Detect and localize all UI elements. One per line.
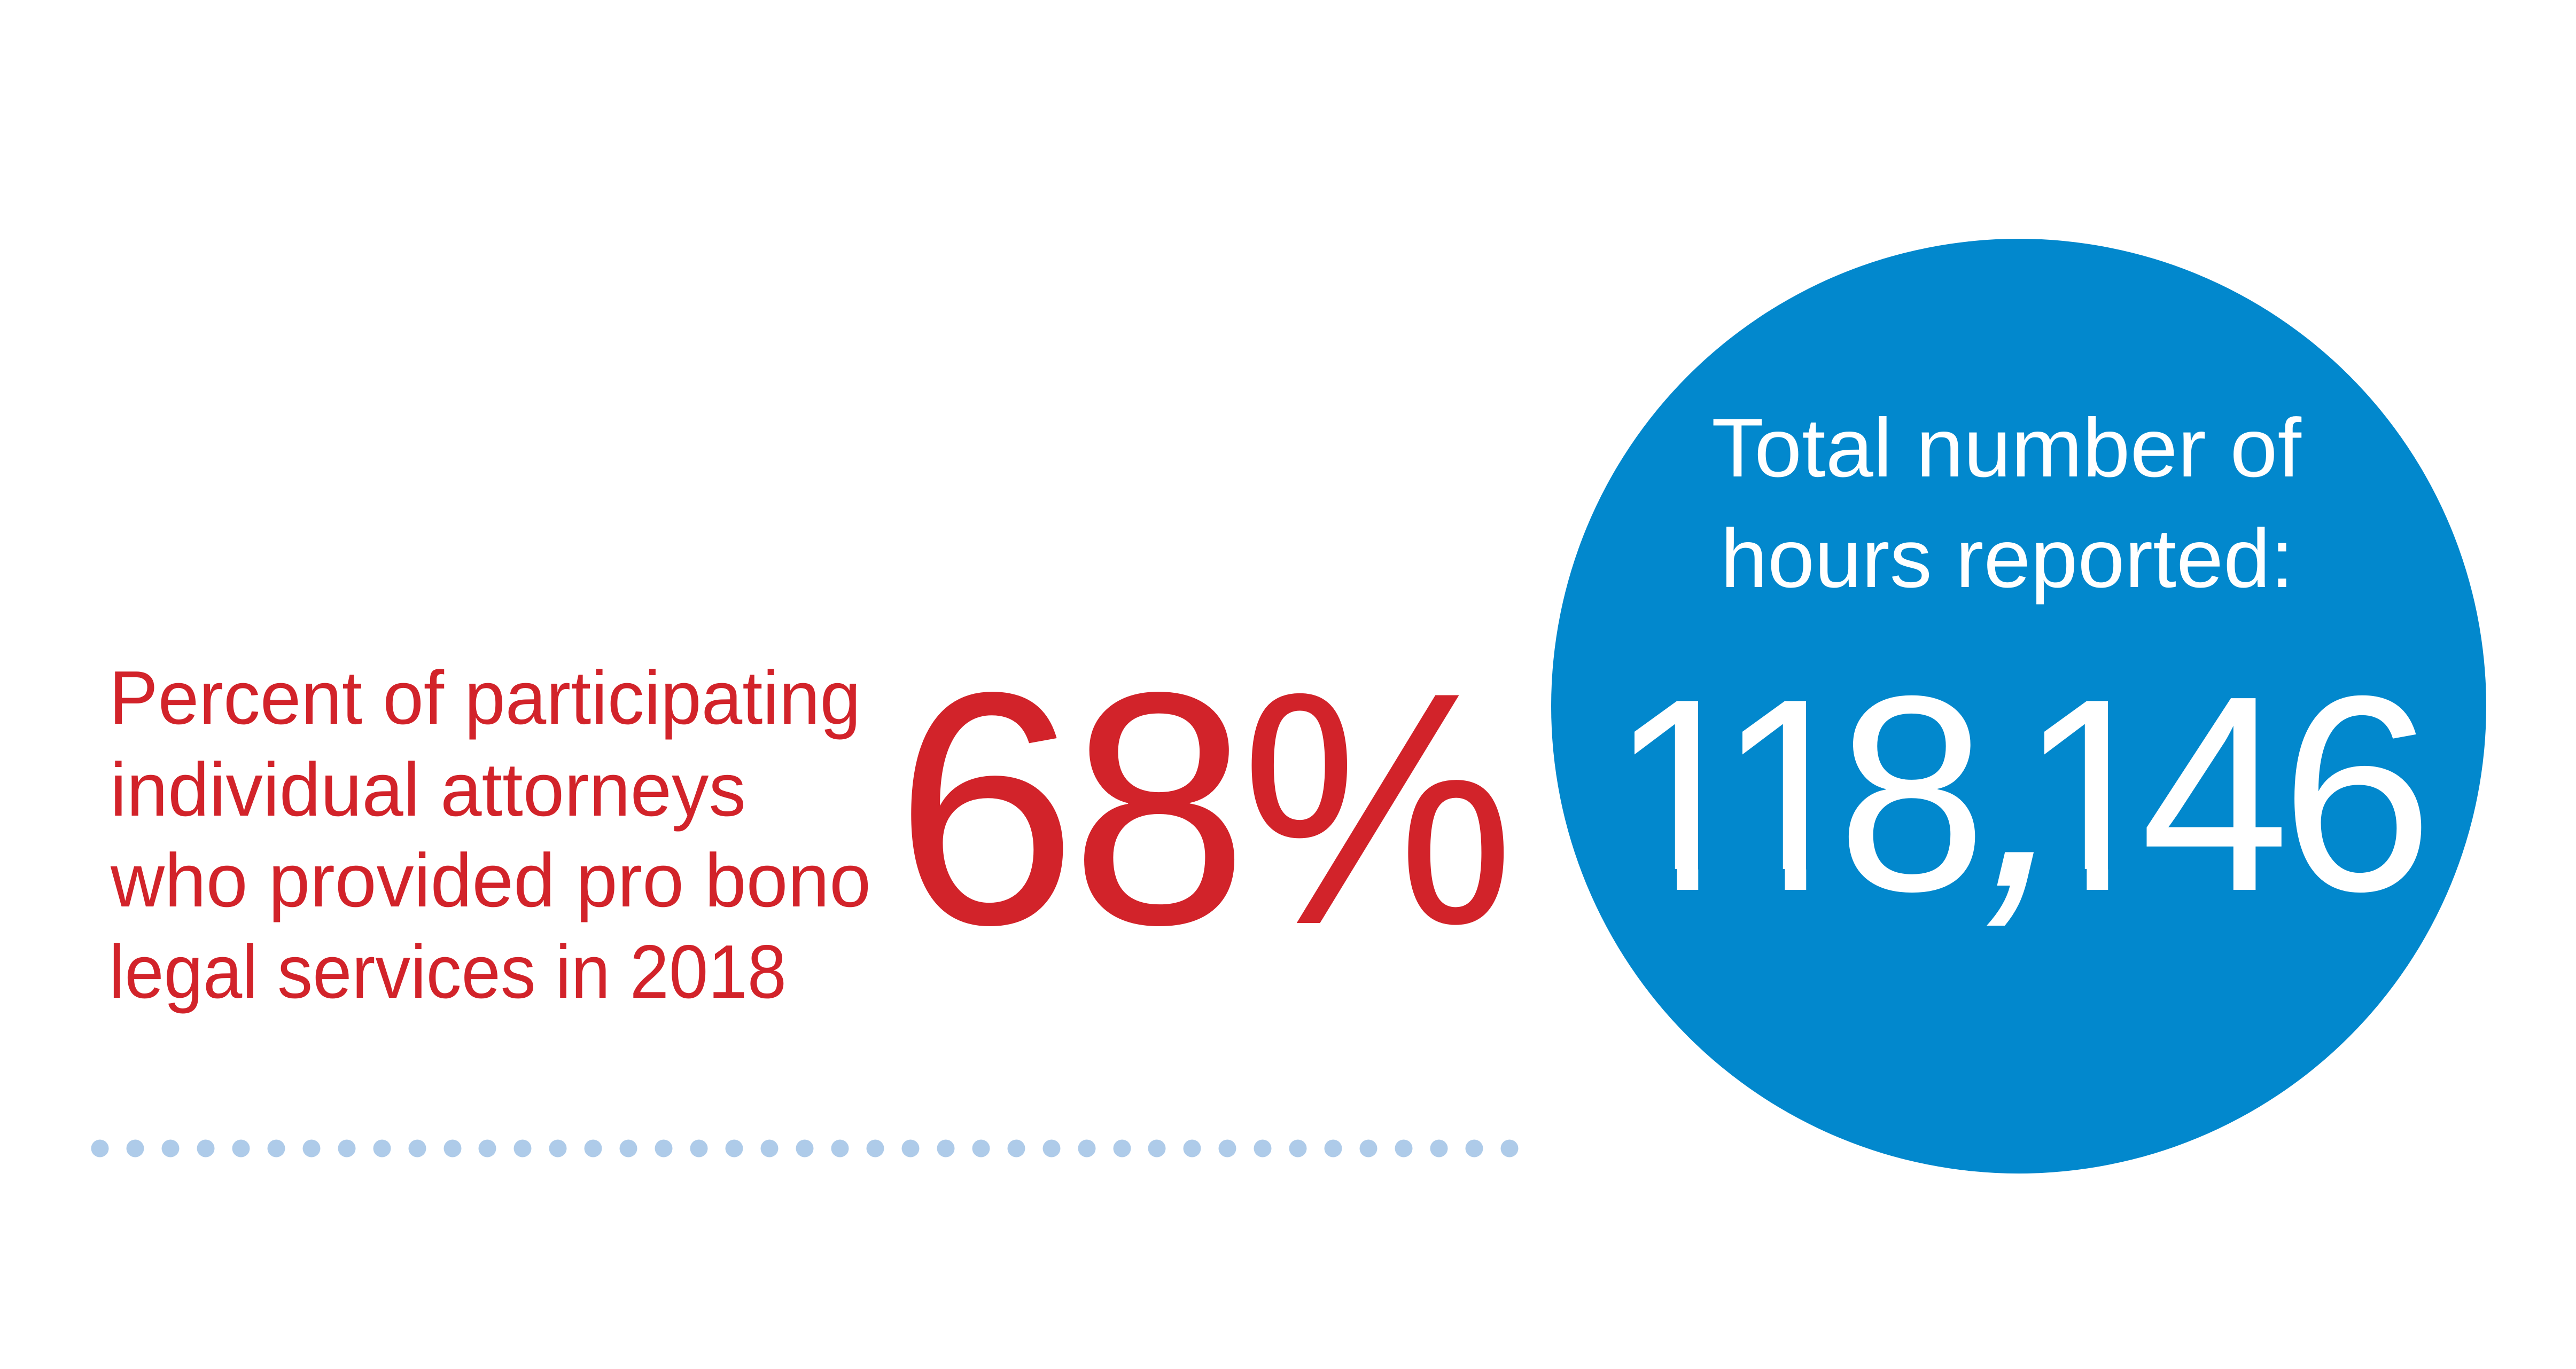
statistic: 68% [894,623,1515,993]
statistic: 118,146: 4 [2141,638,2289,949]
statistic: 118,146: 1 [2019,642,2165,949]
heading: total number of hours reported: hours reported: [1721,512,2294,605]
statistic: 118,146 [1634,695,2422,926]
description text: percent of participating attorneys [109,655,871,1014]
description text: percent of participating attorneys: Percent of participating [109,655,861,740]
heading: total number of hours reported: Total number of [1711,402,2302,495]
description text: percent of participating attorneys: who provided pro bono [110,838,871,923]
dotted divider [91,1140,1519,1157]
circle background [1551,239,2486,1174]
statistic: 118,146: 6 [2281,638,2433,949]
heading: total number of hours reported [1711,402,2302,605]
statistic: 118,146: 1 [1609,642,1755,949]
description text: percent of participating attorneys: individual attorneys [110,747,746,832]
description text: percent of participating attorneys: legal services in 2018 [109,929,787,1014]
panel: blue circle with total hours [1551,239,2486,1174]
statistic: 118,146: 1 [1717,642,1863,949]
statistic: 118,146: 8 [1837,638,1987,949]
statistic: 68%: % [1241,623,1515,993]
statistic: 118,146: , [1954,602,2120,952]
statistic: 68%: 6 [894,623,1077,993]
statistic: 68%: 8 [1070,624,1248,993]
